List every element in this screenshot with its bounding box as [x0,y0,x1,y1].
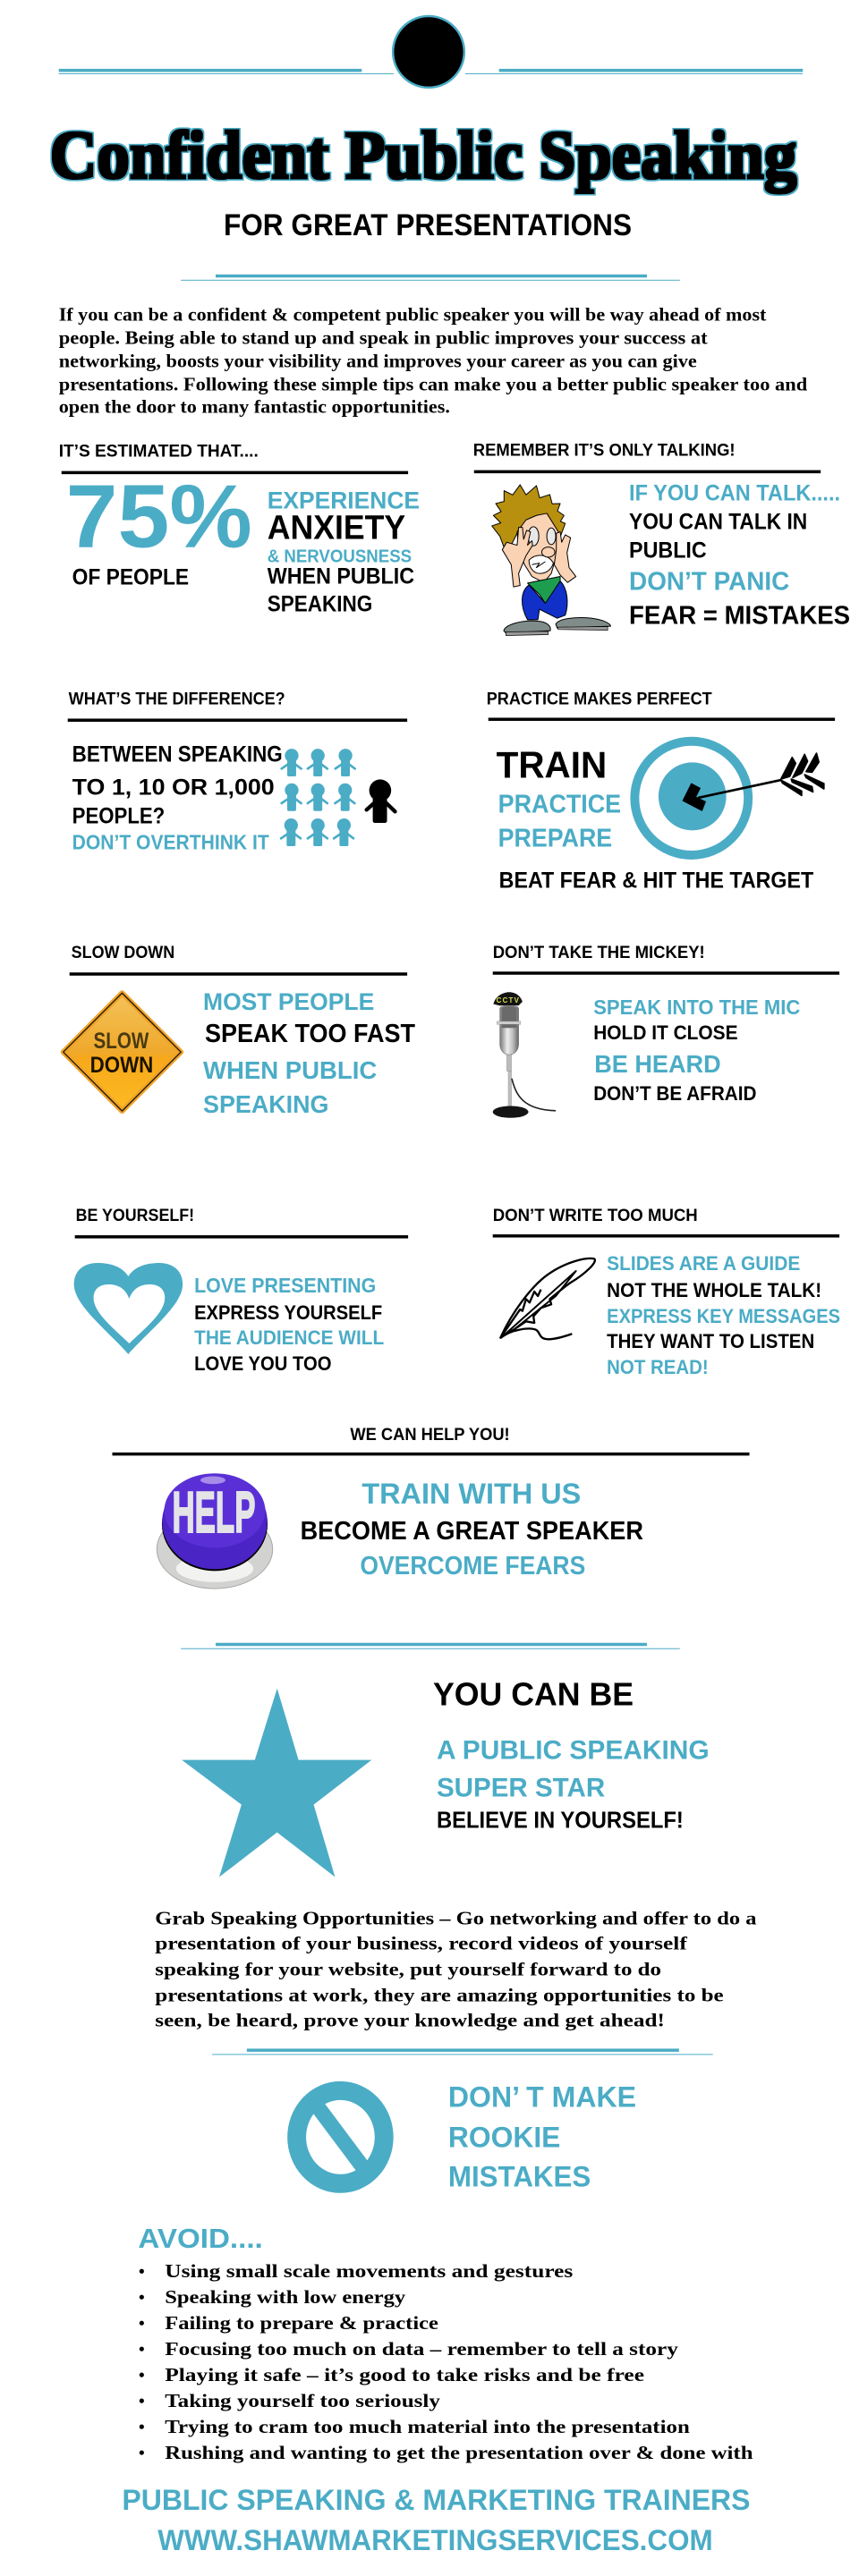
text block: FEAR = MISTAKES [629,601,850,631]
heading: DON’T TAKE THE MICKEY! [493,944,705,962]
icon: quill pen [500,1258,595,1339]
panel: practice makes perfect [487,690,835,893]
text block [433,1676,710,1834]
text block: SLIDES ARE A GUIDE [607,1252,800,1275]
panel: slow down [64,944,415,1118]
text block [301,1478,643,1580]
icon: vintage microphone: CCTV [497,996,520,1004]
heading: SLOW DOWN [72,944,174,962]
icon: heart [74,1263,183,1354]
subtitle: FOR GREAT PRESENTATIONS [224,208,632,242]
heading: PRACTICE MAKES PERFECT [487,690,712,708]
panel: what's the difference [68,690,407,853]
text block: HOLD IT CLOSE [593,1021,738,1044]
text block: DON’T OVERTHINK IT [72,830,269,853]
text block: & NERVOUSNESS [268,547,412,567]
text block: YOU CAN TALK IN [629,510,807,535]
title: Confident Public Speaking [50,118,796,193]
heading: WHAT’S THE DIFFERENCE? [69,690,285,708]
text block: SPEAK TOO FAST [205,1020,415,1048]
bullet list: Trying to cram too much material into the presentation [165,2416,690,2437]
text block: DON’T BE AFRAID [593,1082,756,1105]
bullet list [140,2260,753,2463]
text block: DON’ T MAKE [448,2080,636,2113]
divider [212,2048,713,2055]
text block: NOT READ! [607,1356,709,1378]
text block: NOT THE WHOLE TALK! [607,1279,821,1301]
icon: help button: HELP [173,1479,255,1545]
paragraph: grab speaking opportunities: speaking for your website, put yourself forward to do [155,1958,661,1979]
heading: BE YOURSELF! [76,1207,194,1225]
text block: SPEAKING [268,591,372,617]
text block: THE AUDIENCE WILL [194,1326,384,1349]
text block [72,741,283,853]
paragraph: grab speaking opportunities [155,1907,757,2030]
footer: PUBLIC SPEAKING & MARKETING TRAINERS [122,2484,751,2516]
text block: IF YOU CAN TALK..... [629,481,840,506]
bullet list: Taking yourself too seriously [165,2390,441,2411]
bullet list: Speaking with low energy [165,2286,406,2308]
text block [629,481,850,631]
panel: super star [182,1676,710,1877]
text block [268,487,420,617]
bullet list: Playing it safe – it’s good to take risks and be free [165,2364,644,2385]
panel: avoid list [138,2223,753,2463]
intro paragraph: open the door to many fantastic opportunities. [59,396,450,418]
text block: YOU CAN BE [433,1676,634,1713]
text block: EXPRESS KEY MESSAGES [607,1305,840,1327]
text block: PREPARE [498,824,612,852]
text block: PEOPLE? [72,803,165,828]
heading: WE CAN HELP YOU! [350,1426,510,1445]
icon: no sign [297,2090,384,2183]
caption: BEAT FEAR & HIT THE TARGET [499,868,813,893]
text block: MOST PEOPLE [203,988,374,1015]
text block: BECOME A GREAT SPEAKER [301,1517,643,1546]
heading: DON’T WRITE TOO MUCH [493,1207,698,1225]
paragraph: grab speaking opportunities: presentation of your business, record videos of yourself [155,1932,688,1953]
icon: target and arrow [634,741,824,855]
icon: help button [157,1473,273,1589]
icon: slow down sign: DOWN [90,1053,153,1078]
bullet list: Failing to prepare & practice [165,2312,438,2334]
panel: rookie mistakes [297,2080,636,2192]
text block: ROOKIE [448,2121,560,2153]
icon: worried cartoon man [492,485,610,635]
panel: it's estimated that [59,443,420,617]
bullet list: Rushing and wanting to get the presentation over & done with [165,2442,753,2463]
of people: OF PEOPLE [72,565,189,590]
text block: BETWEEN SPEAKING [72,741,283,767]
text block: WHEN PUBLIC [268,564,414,589]
intro paragraph: networking, boosts your visibility and improves your career as you can give [59,351,697,372]
text block: A PUBLIC SPEAKING [437,1736,710,1766]
text block: TO 1, 10 OR 1,000 [72,775,275,800]
heading: IT’S ESTIMATED THAT.... [59,443,259,462]
text block: PUBLIC [629,538,707,564]
text block: TRAIN WITH US [361,1478,581,1510]
text block [203,988,415,1118]
icon: slow down sign [64,993,181,1111]
footer [122,2484,751,2556]
text block: SUPER STAR [437,1774,605,1803]
icon: star [182,1689,371,1877]
intro paragraph: presentations. Following these simple tips can make you a better public speaker too and [59,374,808,395]
text block [593,996,800,1105]
text block [497,743,621,852]
text block [607,1252,840,1378]
text block: BELIEVE IN YOURSELF! [437,1809,684,1834]
text block: DON’T PANIC [629,567,789,597]
panel: be yourself [74,1207,408,1375]
text block: THEY WANT TO LISTEN [607,1330,814,1352]
icon: crowd of people [281,749,355,846]
text block: EXPRESS YOURSELF [194,1301,382,1324]
text block: LOVE PRESENTING [194,1274,376,1297]
text block: MISTAKES [448,2160,591,2192]
heading: REMEMBER IT’S ONLY TALKING! [473,442,736,461]
text block: BE HEARD [594,1050,721,1078]
intro paragraph: people. Being able to stand up and speak in public improves your success at [59,327,708,349]
panel: don't write too much [493,1207,840,1378]
icon: single speaker person [367,779,395,823]
bullet list: Using small scale movements and gestures [165,2260,573,2282]
text block [194,1274,384,1375]
text block: OVERCOME FEARS [360,1552,585,1580]
intro paragraph [59,304,808,418]
panel: remember it's only talking [473,442,850,635]
text block: EXPERIENCE [268,487,420,514]
paragraph: grab speaking opportunities: Grab Speaking Opportunities – Go networking and offer to do a [155,1907,757,1929]
panel: we can help you [112,1426,750,1589]
text block: SPEAKING [203,1090,328,1118]
icon: slow down sign: SLOW [94,1029,149,1054]
big stat: 75% [66,467,252,567]
icon: vintage microphone [493,992,556,1118]
text block: WHEN PUBLIC [203,1056,377,1084]
divider [181,1643,680,1649]
intro paragraph: If you can be a confident & competent public speaker you will be way ahead of most [59,304,766,326]
text block [448,2080,636,2192]
text block: ANXIETY [268,510,405,547]
text block: SPEAK INTO THE MIC [593,996,800,1019]
paragraph: grab speaking opportunities: seen, be heard, prove your knowledge and get ahead! [155,2009,665,2030]
panel: don't take the mickey [493,944,839,1118]
bullet list: Focusing too much on data – remember to tell a story [165,2338,678,2360]
heading: AVOID.... [138,2223,263,2254]
text block: LOVE YOU TOO [194,1352,331,1375]
divider [181,275,680,281]
paragraph: grab speaking opportunities: presentations at work, they are amazing opportunities to be [155,1984,724,2005]
text block: PRACTICE [498,790,621,818]
text block: TRAIN [497,743,607,785]
header ornament with circle [59,16,803,88]
footer: WWW.SHAWMARKETINGSERVICES.COM [157,2524,713,2556]
